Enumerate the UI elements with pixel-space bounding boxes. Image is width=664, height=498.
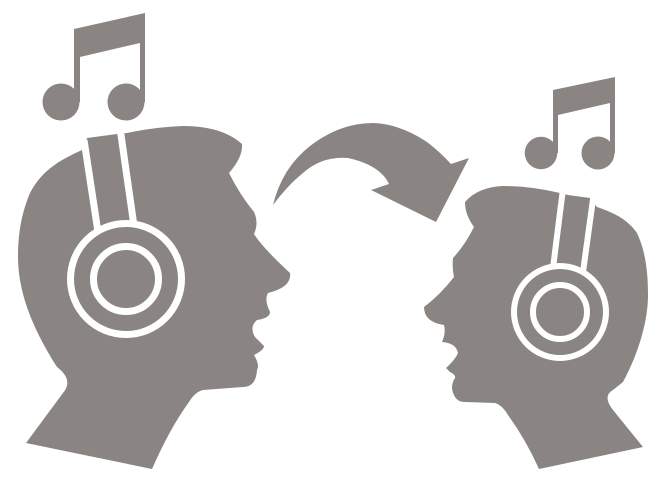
icon: left head with headphones bbox=[18, 126, 290, 469]
icon: small music note bbox=[525, 77, 615, 170]
icon: right head with headphones bbox=[424, 186, 648, 469]
icon: large music note bbox=[42, 13, 145, 120]
arrow: curved arrow from left head to right head bbox=[273, 123, 469, 222]
